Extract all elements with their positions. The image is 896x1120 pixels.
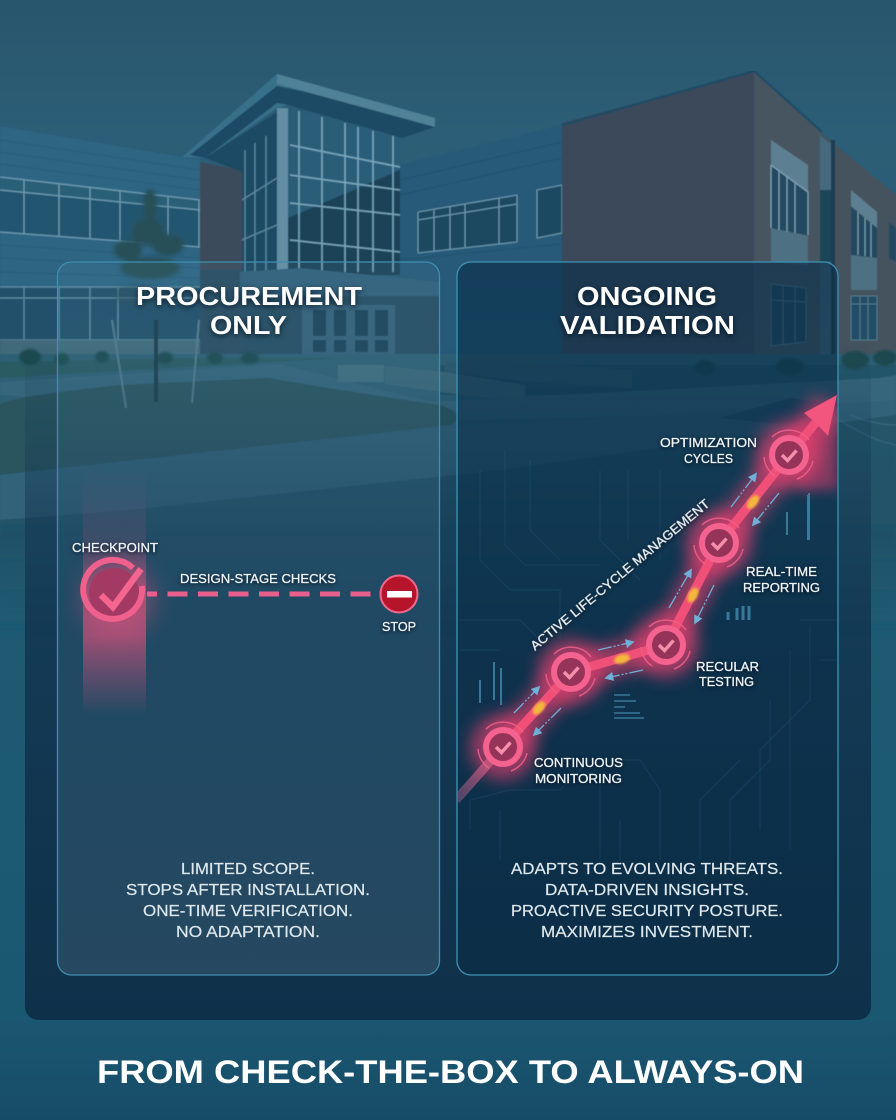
heading: ongoing validation: VALIDATION [560, 310, 735, 340]
label: real-time reporting [743, 565, 820, 595]
panel: procurement only [58, 262, 440, 975]
pink glow column [83, 470, 146, 715]
text block: limitations: ONE-TIME VERIFICATION. [143, 903, 353, 920]
circuit background [460, 450, 838, 860]
tail [457, 758, 494, 803]
shrubs [19, 349, 896, 376]
heading: procurement only: ONLY [210, 310, 287, 340]
heading: ongoing validation [560, 281, 735, 340]
label: regular testing [696, 660, 759, 689]
dark backing panel [25, 260, 871, 1020]
label: continuous monitoring: CONTINUOUS [534, 756, 623, 770]
icon: checkpoint [82, 560, 154, 636]
heading: ongoing validation: ONGOING [577, 281, 717, 311]
dashed line [147, 592, 374, 596]
brick block [562, 71, 822, 378]
label: active life-cycle management: ACTIVE LIFE-CYCLE MANAGEMENT [528, 497, 713, 653]
label: continuous monitoring [534, 756, 623, 786]
checkpoints [478, 430, 813, 771]
title: FROM CHECK-THE-BOX TO ALWAYS-ON [97, 1054, 804, 1090]
label: optimization cycles [660, 436, 757, 466]
path glow [470, 400, 838, 780]
text block: benefits: DATA-DRIVEN INSIGHTS. [545, 882, 749, 899]
text block: benefits: ADAPTS TO EVOLVING THREATS. [511, 861, 783, 878]
label: regular testing: RECULAR [696, 660, 759, 674]
label: real-time reporting: REPORTING [743, 581, 820, 595]
text block: limitations: STOPS AFTER INSTALLATION. [126, 882, 370, 899]
left wing [0, 126, 200, 356]
text block: benefits: MAXIMIZES INVESTMENT. [541, 924, 753, 941]
label: optimization cycles: CYCLES [684, 452, 733, 466]
text block: limitations: NO ADAPTATION. [176, 924, 320, 941]
label: optimization cycles: OPTIMIZATION [660, 436, 757, 450]
tower [182, 74, 435, 275]
brick connector [200, 162, 242, 270]
tree [112, 189, 199, 408]
far right wing [820, 132, 896, 366]
label: design-stage checks: DESIGN-STAGE CHECKS [180, 572, 336, 586]
entrance canopy and doors [240, 268, 440, 356]
label: checkpoint: CHECKPOINT [72, 541, 158, 555]
label: continuous monitoring: MONITORING [535, 772, 622, 786]
icon: stop [380, 576, 418, 612]
heading: procurement only [136, 281, 362, 340]
label: stop: STOP [382, 620, 416, 634]
data bars [480, 493, 809, 718]
label: real-time reporting: REAL-TIME [746, 565, 817, 579]
text block: benefits: PROACTIVE SECURITY POSTURE. [511, 903, 783, 920]
panel: ongoing validation [456, 262, 838, 975]
path line [503, 420, 818, 747]
arrowhead [804, 395, 837, 436]
ground [0, 354, 896, 640]
text block: limitations: LIMITED SCOPE. [181, 861, 315, 878]
label: regular testing: TESTING [699, 675, 754, 689]
chart: rising life-cycle path [456, 395, 838, 800]
photo: school building [0, 71, 896, 640]
small flow arrows [514, 474, 779, 735]
energy pulses [530, 493, 761, 717]
right wing siding [400, 125, 562, 365]
heading: procurement only: PROCUREMENT [136, 281, 362, 311]
text block: limitations [126, 861, 370, 941]
text block: benefits [511, 861, 783, 941]
